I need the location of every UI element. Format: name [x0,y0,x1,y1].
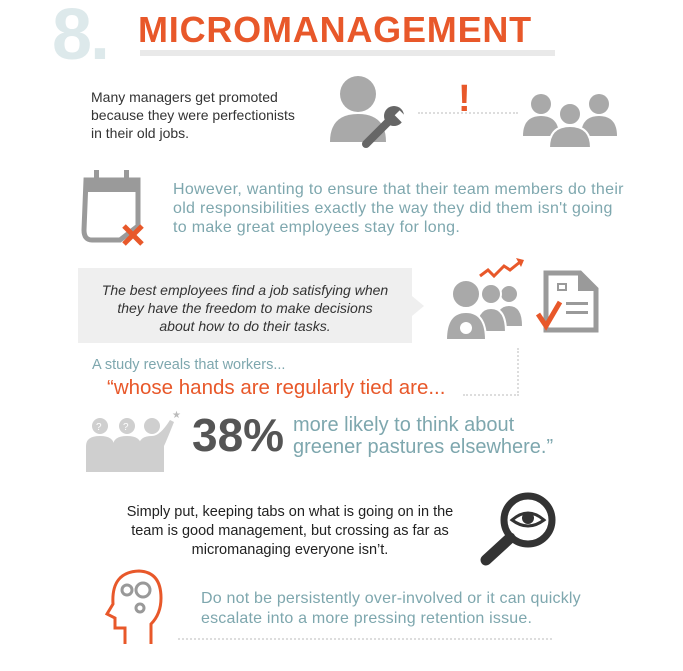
icon: questioning people [86,410,181,472]
callout box: The best employees find a job satisfying when [102,282,388,298]
text: perfectionists: Many managers get promoted [91,89,278,105]
icon: checked document [536,270,598,332]
text: study: A study reveals that workers... [92,357,285,373]
icon: happy employees with trend arrow [447,258,524,339]
text: however: However, wanting to ensure that their team members do their [173,181,624,198]
text: simply put: team is good management, but crossing as far as [131,523,449,539]
callout box [78,268,412,343]
stat text: greener pastures elsewhere.” [293,436,553,458]
title: MICROMANAGEMENT [138,9,532,50]
text: do not: Do not be persistently over-involved or it can quickly [201,590,581,607]
icon: calendar with x [82,170,144,246]
quote: “whose hands are regularly tied are... [107,376,445,399]
text: simply put: micromanaging everyone isn’t. [192,542,388,558]
text: do not [201,590,581,627]
text: perfectionists: in their old jobs. [91,125,189,141]
icon: questioning people: ? [96,422,102,433]
text: do not: escalate into a more pressing retention issue. [201,610,532,627]
title underline [140,50,555,56]
text: however: to make great employees stay for long. [173,219,460,236]
text: however [173,181,624,236]
dotted connector with exclamation: ! [458,78,471,120]
icon: magnifier with eye [480,492,556,566]
icon: questioning people: ★ [172,410,181,421]
icon: head with gears [105,570,162,644]
text: however: old responsibilities exactly the way they did them isn't going [173,200,613,217]
callout box: about how to do their tasks. [159,318,331,334]
dotted connector [463,348,519,396]
text: simply put: Simply put, keeping tabs on what is going on in the [127,504,453,520]
text: simply put [127,504,453,558]
icon: manager with wrench [330,76,404,148]
text: perfectionists: because they were perfectionists [91,107,295,123]
icon: team group [523,94,617,147]
stat text: more likely to think about [293,414,514,436]
stat text [293,414,553,458]
icon: questioning people: ? [123,422,129,433]
text: perfectionists [91,89,295,141]
stat 38%: 38% [192,409,284,461]
callout box: they have the freedom to make decisions [117,300,373,316]
